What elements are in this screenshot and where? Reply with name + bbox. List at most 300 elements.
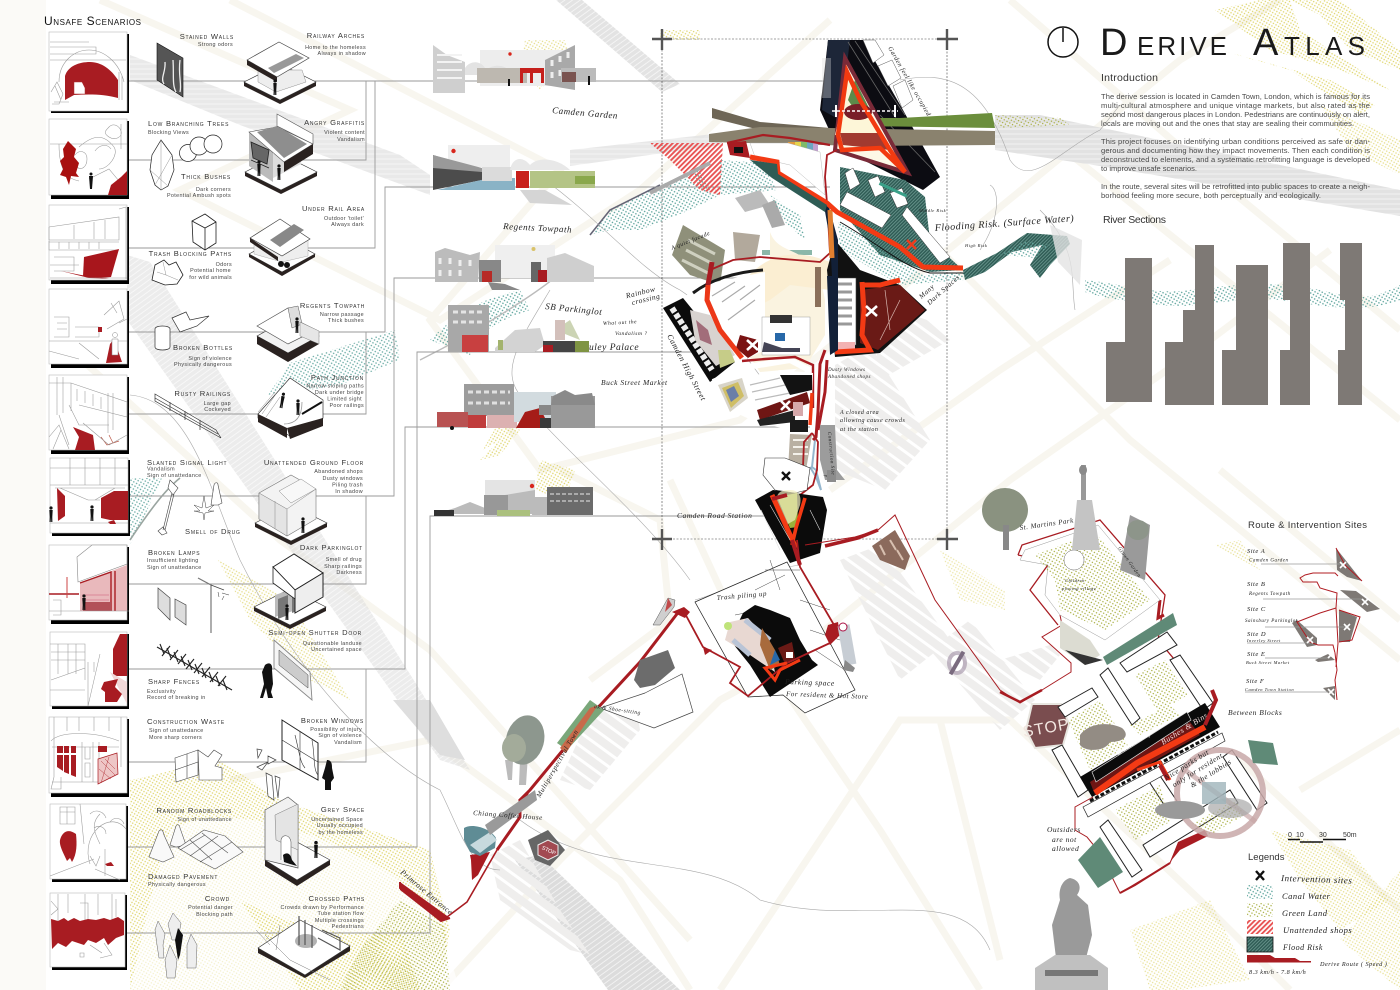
caption: low branching trees: Low Branching Trees xyxy=(148,119,229,128)
caption: unattended ground floor: Unattended Ground Floor xyxy=(264,458,364,467)
caption: crowd xyxy=(188,894,233,918)
note: camden road station: Camden Road Station xyxy=(677,511,752,520)
scale bar: 30 xyxy=(1319,832,1327,839)
thumbnail: regents towpath xyxy=(49,289,129,368)
note: dusty windows: Abandoned shops xyxy=(827,375,871,380)
note: flooding risk: Flooding Risk. (Surface Water) xyxy=(933,213,1075,234)
icon: right statue xyxy=(1120,515,1150,580)
caption: unattended ground floor: In shadow xyxy=(335,489,363,495)
thumbnail: construction waste xyxy=(49,717,129,797)
mini map: route xyxy=(1297,548,1362,700)
caption: unattended ground floor: Piling trash xyxy=(332,482,363,488)
text block: paragraph 1: The derive session is located in Camden Town, London, which is famous for its xyxy=(1101,92,1370,101)
legend: canal water xyxy=(1247,885,1331,901)
caption: unattended ground floor xyxy=(264,458,364,495)
caption: slanted signal light: Slanted Signal Light xyxy=(147,458,227,467)
caption: rusty railings xyxy=(174,389,231,413)
text block: paragraph 2 xyxy=(1101,137,1370,173)
caption: construction waste: Construction Waste xyxy=(147,717,225,726)
panel: river sections xyxy=(1103,214,1362,405)
legend: flood risk: Flood Risk xyxy=(1282,943,1323,952)
heading: legends: Legends xyxy=(1248,852,1285,863)
note: children playing: playing village xyxy=(1061,586,1096,591)
icon: prohibition circle xyxy=(1155,750,1263,836)
caption: broken windows: Vandalism xyxy=(334,740,362,746)
caption: dark parkinglot: Darkness xyxy=(336,570,362,576)
caption: crossed paths: Crossed Paths xyxy=(308,894,365,903)
thumbnail: dark parkinglot xyxy=(49,545,129,624)
panel: isometric conditions xyxy=(244,42,350,980)
white street patch xyxy=(750,143,825,195)
caption: random roadblocks: Random Roadblocks xyxy=(156,806,232,815)
caption: path junction xyxy=(306,373,364,409)
note: chiang coffee house: Chiang Coffee House xyxy=(473,809,543,822)
caption: grey space: by the homeless xyxy=(318,830,363,836)
icon: traffic cones and damaged pavement xyxy=(149,825,243,869)
panel: route map centre xyxy=(650,29,1082,565)
thumbnail: random roadblocks xyxy=(50,804,128,882)
caption: sharp fences xyxy=(147,677,206,701)
caption: grey space: Grey Space xyxy=(321,805,365,814)
caption: rusty railings: Cockeyed xyxy=(204,407,231,413)
caption: broken bottles: Broken Bottles xyxy=(173,343,233,352)
caption: broken bottles: Physically dangerous xyxy=(174,362,232,368)
caption: dark parkinglot xyxy=(300,543,363,576)
text block: paragraph 1: multi-cultural atmosphere and unique vintage markets, but also rated as the xyxy=(1101,101,1370,110)
site: buck street market block xyxy=(717,370,813,432)
icon: rusty railing xyxy=(155,394,221,438)
note: rainbow crossing: crossing xyxy=(631,291,661,307)
heading: atlas: A xyxy=(1253,22,1279,64)
note: garden occupied: Garden feel like occupied xyxy=(886,46,932,118)
note: trash piling up: Trash piling up xyxy=(716,590,767,602)
note: sb parkinglot: SB Parkinglot xyxy=(545,301,603,317)
caption: path junction: Path Junction xyxy=(311,373,364,382)
isometric: grey space xyxy=(265,797,330,886)
park outline and greenery xyxy=(1020,525,1160,665)
site: tube sign cluster xyxy=(838,623,856,672)
street section: camden road station xyxy=(434,480,593,516)
grey canal banks left xyxy=(650,160,805,240)
street section: camden garden xyxy=(433,45,596,93)
note: nice parks: only for resident xyxy=(1171,751,1225,789)
note: vertical park side: Grown Garden xyxy=(1116,546,1141,579)
note: closed area: A closed area xyxy=(839,410,879,416)
map extent dashed frame xyxy=(652,29,958,550)
icon: trash bin and trash bag xyxy=(152,214,216,285)
caption: railway arches: Always in shadow xyxy=(318,51,366,57)
text block: paragraph 1: locals are moving out and the ones that stay are sealing their communities. xyxy=(1101,119,1354,128)
note: vandalism question: What out the xyxy=(603,319,637,327)
caption: broken windows xyxy=(301,716,364,746)
caption: thick bushes xyxy=(167,172,231,199)
street section: jewellery palace xyxy=(448,305,589,352)
isometric: angry graffitis xyxy=(245,114,317,194)
heading: route and intervention sites: Route & Intervention Sites xyxy=(1248,520,1367,531)
icon: rotated stop sign xyxy=(528,830,565,866)
caption: thick bushes: Dark corners xyxy=(196,187,231,193)
caption: unattended ground floor: Dusty windows xyxy=(322,476,363,482)
note: nice parks: & the lobbies xyxy=(1189,757,1233,790)
note: dark spaces: Dark Spaces xyxy=(925,273,962,307)
legend: flood risk xyxy=(1247,937,1323,952)
scale bar: 0 xyxy=(1288,832,1292,839)
legend: unattended shops: Unattended shops xyxy=(1283,925,1352,935)
caption: trash blocking paths xyxy=(149,249,232,281)
site labels: Site E xyxy=(1247,651,1265,658)
site: middle collage to station xyxy=(788,350,845,495)
note: parking space: For resident & Hot Store xyxy=(785,690,868,701)
note: closed area: at the station xyxy=(840,427,878,433)
caption: under rail area: Under Rail Area xyxy=(302,204,365,213)
legend: green land xyxy=(1247,903,1328,918)
caption: angry graffitis: Violent content xyxy=(324,130,365,136)
caption: under rail area: Outdoor 'toilet' xyxy=(324,216,364,222)
panel: route south xyxy=(400,530,967,922)
caption: crossed paths: Crowds drawn by Performance xyxy=(281,905,364,911)
caption: grey space xyxy=(311,805,365,836)
caption: crossed paths: Pedestrians xyxy=(332,924,364,930)
icon: low branching tree and bushes xyxy=(150,135,222,190)
caption: railway arches: Home to the homeless xyxy=(305,45,366,51)
caption: slanted signal light: Vandalism xyxy=(147,466,175,472)
thumbnail: sharp fences xyxy=(50,632,129,709)
route: around park xyxy=(805,515,1213,705)
site: parking block outline xyxy=(695,560,855,713)
caption: damaged pavement: Damaged Pavement xyxy=(148,872,218,881)
caption: trash blocking paths: for wild animals xyxy=(189,275,232,281)
isometric: dark parkinglot xyxy=(254,554,326,629)
caption: crossed paths xyxy=(281,894,365,930)
caption: crossed paths: Multiple crossings xyxy=(315,918,364,924)
note: closed area: allowing cause crowds xyxy=(840,418,905,424)
legend: intervention sites xyxy=(1256,871,1352,885)
text block: paragraph 1 xyxy=(1101,92,1370,128)
scale bar: 10 xyxy=(1296,832,1304,839)
site labels: Sainsbury Parkinglot xyxy=(1245,619,1298,624)
legend: derive route speed: 8.3 km/h - 7.8 km/h xyxy=(1249,969,1306,976)
note: children playing xyxy=(1061,578,1096,591)
mini map: intervention marks xyxy=(1307,562,1368,695)
icon: stained wall panel xyxy=(157,43,183,97)
note: regents towpath: Regents Towpath xyxy=(502,221,572,235)
icon: clock xyxy=(1048,27,1078,57)
heading: introduction: Introduction xyxy=(1101,72,1158,84)
caption: regents towpath xyxy=(300,301,365,324)
note: tunnel: Multiperspectival Town xyxy=(534,728,580,800)
site: camden high street block xyxy=(663,267,821,382)
caption: rusty railings: Rusty Railings xyxy=(174,389,231,398)
caption: under rail area xyxy=(302,204,365,228)
caption: smell of drug: Smell of Drug xyxy=(185,527,241,536)
caption: angry graffitis xyxy=(304,118,365,143)
caption: broken windows: Sign of violence xyxy=(318,733,362,739)
note: outsiders: are not xyxy=(1052,835,1077,844)
note: outsiders: allowed xyxy=(1052,844,1079,853)
caption: grey space: Uncertained Space xyxy=(311,817,363,823)
caption: path junction: Poor railings xyxy=(329,403,364,409)
caption: dark parkinglot: Sharp railings xyxy=(324,564,362,570)
site: camden road station xyxy=(755,458,827,565)
site labels: Site C xyxy=(1247,606,1266,613)
icon: stop sign: STOP xyxy=(1021,716,1071,741)
caption: angry graffitis: Vandalism xyxy=(337,137,365,143)
scale bar: 50m xyxy=(1343,832,1357,839)
note: children playing: Children xyxy=(1065,578,1085,583)
caption: crowd: Crowd xyxy=(205,894,230,903)
caption: construction waste: More sharp corners xyxy=(149,735,202,741)
site labels: Inverley Street xyxy=(1246,638,1281,643)
caption: low branching trees xyxy=(148,119,229,136)
panel: route and intervention sites xyxy=(1245,520,1380,700)
note: closed area xyxy=(839,410,905,433)
caption: sharp fences: Exclusivity xyxy=(147,689,176,695)
panel: street section collages xyxy=(433,45,596,516)
heading: derive xyxy=(1100,22,1227,64)
text block: paragraph 2: deconstructed to elements, and a systematic retrofitting language is developed xyxy=(1101,155,1370,164)
text block: paragraph 1: second most dangerous places in London. Pedestrians are continuously on alert, xyxy=(1101,110,1370,119)
caption: low branching trees: Blocking Views xyxy=(148,130,189,136)
thin river contour lines xyxy=(130,77,1120,950)
caption: broken lamps: Broken Lamps xyxy=(148,548,200,557)
thumbnail: low branching trees xyxy=(49,119,129,199)
caption: semi-open shutter door: Uncertained space xyxy=(311,647,362,653)
caption: regents towpath: Thick bushes xyxy=(328,318,364,324)
unattended shops hatch near canal xyxy=(650,143,723,195)
icon: sharp fence xyxy=(157,644,232,690)
panel: legends xyxy=(1247,852,1387,976)
note: high risk: High Risk xyxy=(964,243,988,248)
note: rainbow crossing xyxy=(624,283,661,308)
note: dark spaces: Many xyxy=(917,282,936,301)
site: camden garden black blocks xyxy=(820,40,940,190)
isometric: railway arches xyxy=(244,42,316,104)
rainbow crossing xyxy=(788,142,818,152)
note: st martins park: St. Martins Park xyxy=(1019,516,1075,532)
note: nice parks: Nice parks but xyxy=(1162,747,1211,783)
heading: derive: ERIVE xyxy=(1137,31,1227,61)
site: camden high street route xyxy=(707,135,837,408)
caption: stained walls xyxy=(180,32,234,48)
caption: sharp fences: Record of breaking in xyxy=(147,695,206,701)
site labels xyxy=(1245,548,1298,692)
caption: broken windows: Possibility of injury xyxy=(310,727,362,733)
caption: stained walls: Strong odors xyxy=(198,42,233,48)
collage: crossing cluster xyxy=(672,225,830,372)
caption: path junction: Limited sight xyxy=(327,396,362,402)
panel: handwritten annotations xyxy=(398,46,1282,917)
caption: sharp fences: Sharp Fences xyxy=(148,677,200,686)
caption: semi-open shutter door: Questionable landuse xyxy=(303,641,362,647)
caption: slanted signal light xyxy=(147,458,227,479)
collage: grey houses near route xyxy=(557,598,693,753)
isometric: semi-open shutter door with figure xyxy=(260,640,312,700)
legend: derive route speed xyxy=(1247,955,1387,976)
site labels: Site F xyxy=(1246,678,1265,685)
caption: crowd: Potential danger xyxy=(188,905,233,911)
note: outsiders: Outsiders xyxy=(1047,825,1081,834)
note: quiet facade: A quiet facade xyxy=(669,230,711,252)
icon: bus shelter xyxy=(464,790,537,856)
caption: broken bottles: Sign of violence xyxy=(188,356,232,362)
site: camden garden triangle xyxy=(832,58,908,173)
caption: crossed paths: Tube station flow xyxy=(317,911,364,917)
note: dusty windows xyxy=(827,368,871,380)
caption: construction waste xyxy=(147,717,225,741)
isometric: regents towpath xyxy=(257,306,319,362)
estate green dotted courts xyxy=(1068,660,1245,840)
caption: broken bottles xyxy=(173,343,233,368)
estate dark alley: Bushes & Bins xyxy=(1159,711,1210,747)
caption: thick bushes: Potential Ambush spots xyxy=(167,193,231,199)
caption: dark parkinglot: Dark Parkinglot xyxy=(300,543,363,552)
note: vandalism question xyxy=(603,319,648,337)
route: station to parking block xyxy=(400,540,840,922)
note: construction vertical: Construction Site xyxy=(826,432,835,476)
caption: angry graffitis: Angry Graffitis xyxy=(304,118,365,127)
street section: buck street market xyxy=(437,384,595,430)
caption: path junction: Dark under bridge xyxy=(315,390,364,396)
street section: regents towpath xyxy=(433,145,595,205)
route: estate loop xyxy=(1075,797,1208,893)
mini map: site shapes xyxy=(1292,548,1380,700)
legend: canal water: Canal Water xyxy=(1282,891,1331,901)
caption: semi-open shutter door xyxy=(268,628,362,653)
caption: broken lamps: Insufficient lighting xyxy=(147,558,199,564)
note: dark spaces xyxy=(917,266,962,309)
estate dark alley xyxy=(1080,690,1225,817)
thumbnail: slanted signal light xyxy=(49,458,130,536)
isometric: under rail area xyxy=(249,219,315,276)
caption: trash blocking paths: Potential home xyxy=(190,268,231,274)
note: rainbow crossing: Rainbow xyxy=(624,284,656,300)
caption: path junction: Narrow sloping paths xyxy=(306,384,364,390)
estate dark alley: Dash Alley xyxy=(1113,728,1153,757)
caption: rusty railings: Large gap xyxy=(204,401,231,407)
panel: park and estate xyxy=(805,465,1278,990)
text block: paragraph 3: borhood feeling more secure, both perceptually and ecologically. xyxy=(1101,191,1321,200)
legend: intervention sites: Intervention sites xyxy=(1280,873,1352,885)
caption: stained walls: Stained Walls xyxy=(180,32,234,41)
caption: railway arches: Railway Arches xyxy=(307,31,365,40)
caption: damaged pavement: Physically dangerous xyxy=(148,882,206,888)
legend: unattended shops xyxy=(1247,920,1352,935)
isometric: path junction xyxy=(258,378,323,439)
title: derive atlas xyxy=(1048,22,1365,64)
site labels: Site B xyxy=(1247,581,1265,588)
caption: trash blocking paths: Odors xyxy=(216,262,232,268)
thumbnail: trash blocking paths xyxy=(49,205,129,284)
canal with flood edge xyxy=(838,222,1082,285)
note: shoe sitting: uk & Shoe-sitting xyxy=(594,704,641,717)
icon: stop sign xyxy=(1021,704,1071,748)
icon: rotated stop sign: STOP xyxy=(540,845,557,857)
collage: grey building on court xyxy=(1080,724,1126,750)
site labels: Camden Town Station xyxy=(1245,687,1294,692)
heading: atlas: TLAS xyxy=(1284,31,1365,61)
caption: semi-open shutter door: Semi-open Shutter Door xyxy=(268,628,362,637)
heading: unsafe scenarios: Unsafe Scenarios xyxy=(44,14,142,28)
icon: crowd figures xyxy=(155,913,197,978)
text block: paragraph 2: gerous and documenting how they impact movements. Then each condition is xyxy=(1101,146,1370,155)
note: primrose entrance: Primrose Entrance xyxy=(398,867,455,917)
caption: unattended ground floor: Abandoned shops xyxy=(314,469,363,475)
green notice signs xyxy=(1078,613,1278,888)
icon: park tree xyxy=(982,488,1028,550)
caption: construction waste: Sign of unattedance xyxy=(149,728,204,734)
scenario connection lines xyxy=(127,81,840,933)
icon: column statue xyxy=(1072,465,1100,550)
note: buck street market: Buck Street Market xyxy=(601,378,668,387)
isometric: unattended ground floor xyxy=(255,475,327,545)
section profiles xyxy=(1106,243,1362,405)
caption: regents towpath: Narrow passage xyxy=(320,312,364,318)
icon: slanted signal light xyxy=(158,480,178,535)
caption: slanted signal light: Sign of unattedance xyxy=(147,473,202,479)
note: between blocks: Between Blocks xyxy=(1228,708,1282,717)
caption: broken windows: Broken Windows xyxy=(301,716,364,725)
site labels: Regents Towpath xyxy=(1248,592,1291,597)
legend: green land: Green Land xyxy=(1282,908,1328,918)
text block: paragraph 2: to improve unsafe scenarios. xyxy=(1101,164,1197,173)
thumbnail: railway arch xyxy=(49,32,129,113)
text block: paragraph 3 xyxy=(1101,182,1370,200)
note: camden high street: Camden High Street xyxy=(665,333,708,403)
icon: traffic cone and leaf xyxy=(194,483,222,520)
icon: tree xyxy=(500,711,550,785)
note: jewellery palace: uley Palace xyxy=(589,343,639,353)
scale bar xyxy=(1288,832,1357,842)
collage: brick building xyxy=(872,530,910,570)
icon: foreground statue xyxy=(1035,878,1108,990)
caption: railway arches xyxy=(305,31,366,57)
caption: random roadblocks: Sign of unattedance xyxy=(177,817,232,823)
railway bridge bands xyxy=(709,108,1070,146)
background grey building footprints xyxy=(490,300,1060,955)
icon: construction waste xyxy=(175,750,222,782)
caption: thick bushes: Thick Bushes xyxy=(181,172,231,181)
caption: dark parkinglot: Smell of drug xyxy=(326,557,362,563)
isometric: crossed paths xyxy=(256,916,350,980)
text block: paragraph 3: In the route, several sites will be retrofitted into public spaces to create a neigh- xyxy=(1101,182,1370,191)
estate blocks xyxy=(1052,632,1267,877)
mini map: leader lines xyxy=(1245,564,1362,692)
icon: broken lamp and panels xyxy=(158,578,229,633)
caption: broken lamps: Sign of unattedance xyxy=(147,565,202,571)
heading: atlas xyxy=(1253,22,1365,64)
caption: regents towpath: Regents Towpath xyxy=(300,301,365,310)
site labels: Buck Street Market xyxy=(1246,660,1290,665)
heading: derive: D xyxy=(1100,22,1127,64)
panel: scenario captions xyxy=(147,31,366,930)
note: vandalism question: Vandalism ? xyxy=(615,331,648,337)
caption: trash blocking paths: Trash Blocking Paths xyxy=(149,249,232,258)
icon: underground roundel xyxy=(947,651,967,675)
note: outsiders xyxy=(1047,825,1081,853)
caption: crowd: Blocking path xyxy=(196,912,233,918)
caption: grey space: Usually occupied xyxy=(317,823,363,829)
panel: introduction xyxy=(1101,72,1370,200)
caption: random roadblocks xyxy=(156,806,232,823)
canal water dotted bands xyxy=(130,170,1400,545)
site labels: Site D xyxy=(1247,631,1266,638)
note: parking space: Parking space xyxy=(784,677,835,688)
icon: broken bottles xyxy=(155,312,209,350)
note: camden garden: Camden Garden xyxy=(552,105,618,121)
site labels: Camden Garden xyxy=(1249,558,1289,564)
panel: scenario thumbnails xyxy=(49,32,130,970)
site: jewellery block xyxy=(727,141,963,430)
